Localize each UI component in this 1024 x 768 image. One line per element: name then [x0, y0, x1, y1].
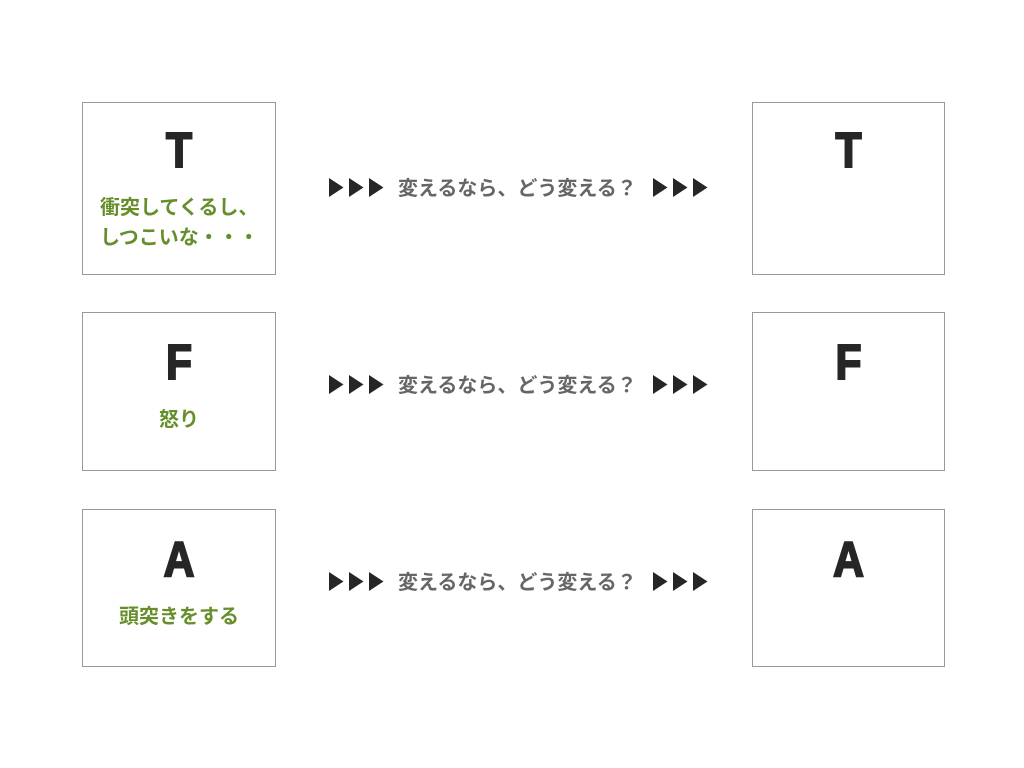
letter A: A — [164, 533, 194, 587]
arrows and prompt: A row — [329, 572, 708, 594]
letter F: F — [166, 336, 192, 390]
prompt text: 変えるなら、どう変える？ — [398, 375, 637, 397]
arrows left — [329, 375, 384, 394]
prompt text: 変えるなら、どう変える？ — [398, 178, 637, 200]
arrows left — [329, 178, 384, 197]
arrows right — [653, 375, 708, 394]
letter T: T — [166, 124, 192, 178]
text: T answer: しつこいな・・・ — [100, 227, 259, 249]
arrows left — [329, 572, 384, 591]
arrows and prompt: F row — [329, 374, 708, 397]
panel: A future — [752, 509, 945, 667]
text: F answer: 怒り — [159, 409, 199, 431]
panel: A current — [82, 509, 276, 667]
letter F: F — [835, 336, 862, 390]
letter T: T — [835, 124, 862, 178]
arrows right — [653, 178, 708, 197]
panel: F future — [752, 312, 945, 471]
arrows and prompt: T row — [329, 178, 708, 200]
text: A answer: 頭突きをする — [119, 606, 239, 628]
text: T answer: 衝突してくるし、 — [100, 197, 258, 219]
panel: T current — [82, 102, 276, 275]
prompt text: 変えるなら、どう変える？ — [398, 572, 637, 594]
arrows right — [653, 572, 708, 591]
letter A: A — [833, 533, 864, 587]
text: T answer — [100, 196, 259, 249]
panel: T future — [752, 102, 945, 275]
panel: F current — [82, 312, 276, 471]
